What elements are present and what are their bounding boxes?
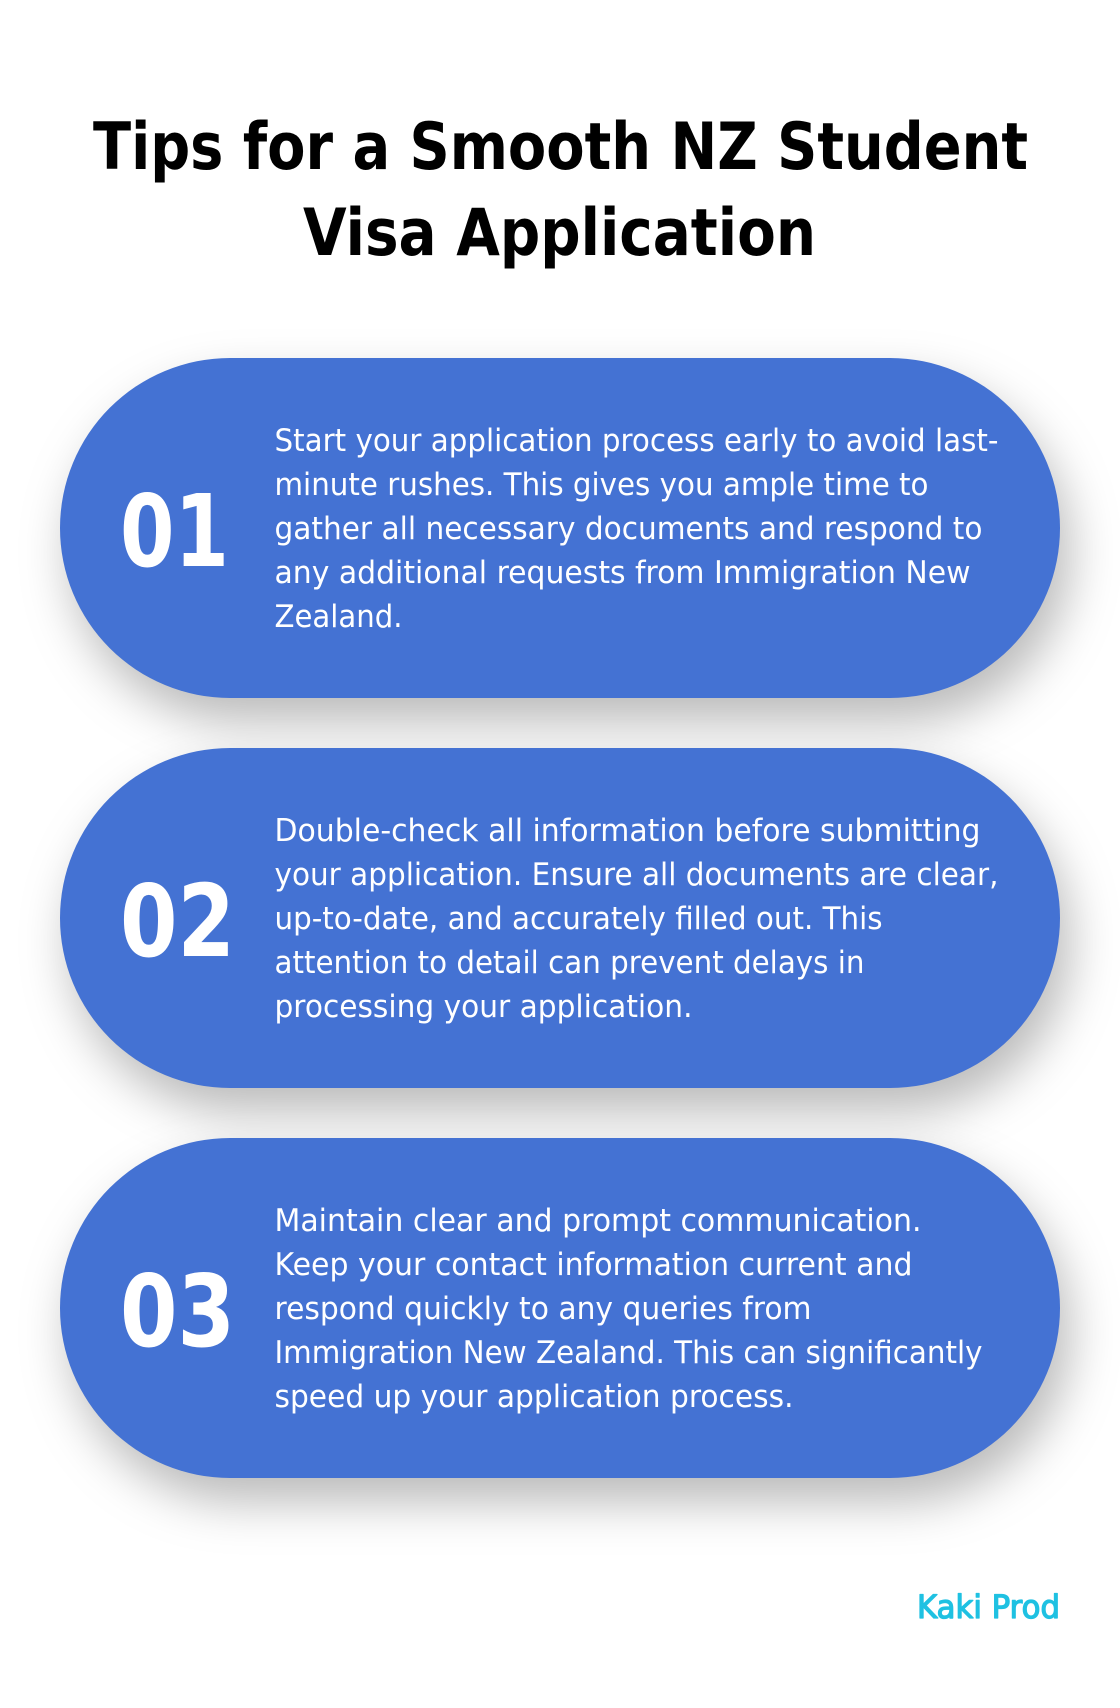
panel: tip 03 bbox=[60, 1138, 1060, 1478]
pill background 03 bbox=[60, 1138, 1060, 1478]
number 02: 02 bbox=[120, 863, 235, 980]
text block 03: Keep your contact information current and bbox=[274, 1247, 912, 1283]
number 03: 03 bbox=[120, 1253, 235, 1370]
text block 02: processing your application. bbox=[274, 989, 692, 1025]
pill background 01 bbox=[60, 358, 1060, 698]
text block 03: Immigration New Zealand. This can significantly bbox=[274, 1335, 982, 1371]
logo: Kaki Prod: Kaki Prod bbox=[917, 1588, 1060, 1626]
text block 03: respond quickly to any queries from bbox=[274, 1291, 812, 1327]
text block 02: Double-check all information before submitting bbox=[274, 813, 980, 849]
number 01: 01 bbox=[120, 473, 229, 590]
panel: tip 01 bbox=[60, 358, 1060, 698]
text block 02: attention to detail can prevent delays in bbox=[274, 945, 864, 981]
text block 01: any additional requests from Immigration New bbox=[274, 555, 970, 591]
text block 03: speed up your application process. bbox=[274, 1379, 794, 1415]
text block 01: Zealand. bbox=[274, 599, 402, 635]
text block 02: your application. Ensure all documents are clear, bbox=[274, 857, 998, 893]
text block 02: up-to-date, and accurately filled out. This bbox=[274, 901, 882, 937]
text block 03 bbox=[274, 1203, 982, 1415]
pill background 02 bbox=[60, 748, 1060, 1088]
text block 02 bbox=[274, 813, 998, 1025]
text block 01: gather all necessary documents and respond to bbox=[274, 511, 982, 547]
title bbox=[93, 110, 1028, 271]
title: Visa Application bbox=[303, 196, 816, 271]
text block 01: Start your application process early to avoid last- bbox=[274, 423, 998, 459]
text block 01 bbox=[274, 423, 998, 635]
text block 03: Maintain clear and prompt communication. bbox=[274, 1203, 922, 1239]
panel: tip 02 bbox=[60, 748, 1060, 1088]
text block 01: minute rushes. This gives you ample time to bbox=[274, 467, 928, 503]
